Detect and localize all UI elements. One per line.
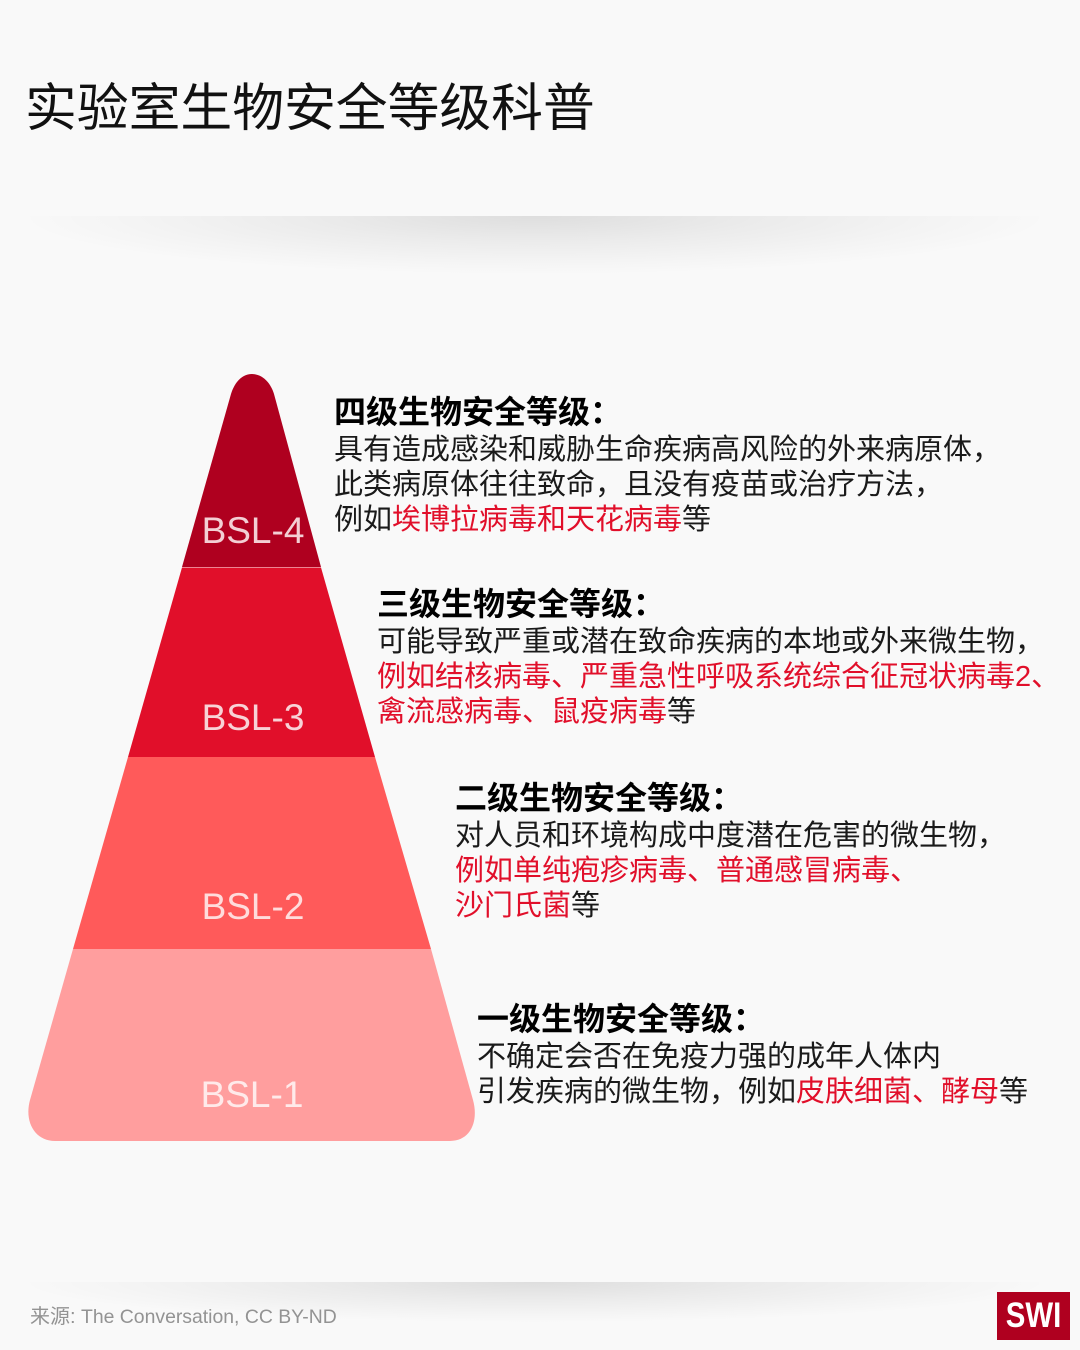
pyramid tier: BSL-2: BSL-2 — [202, 886, 304, 927]
text block: level 4: 四级生物安全等级： — [334, 394, 622, 430]
text block: level 3: 例如结核病毒、严重急性呼吸系统综合征冠状病毒2、 — [377, 660, 1060, 692]
text block: level 2: 对人员和环境构成中度潜在危害的微生物， — [455, 820, 1006, 852]
text block: level 4: 具有造成感染和威胁生命疾病高风险的外来病原体， — [334, 434, 1001, 466]
pyramid tier: BSL-4 — [182, 374, 321, 567]
text block: level 3: 禽流感病毒、鼠疫病毒等 — [377, 696, 696, 728]
logo: SWI — [997, 1292, 1070, 1340]
title: 实验室生物安全等级科普 — [25, 79, 595, 137]
pyramid tier: BSL-3 — [128, 568, 375, 757]
text block: level 1: 引发疾病的微生物，例如皮肤细菌、酵母等 — [477, 1076, 1028, 1108]
pyramid tier: BSL-1 — [28, 949, 475, 1141]
text block: level 3: 可能导致严重或潜在致命疾病的本地或外来微生物， — [377, 626, 1044, 658]
text block: level 2 — [455, 780, 1006, 922]
source note: : — [70, 1306, 76, 1328]
pyramid tier: BSL-1: BSL-1 — [201, 1074, 303, 1115]
text block: level 4: 此类病原体往往致命，且没有疫苗或治疗方法， — [334, 468, 943, 500]
text block: level 2: 二级生物安全等级： — [455, 780, 743, 816]
pyramid tier: BSL-3: BSL-3 — [202, 697, 304, 738]
text block: level 1 — [477, 1001, 1028, 1108]
pyramid tier: BSL-2 — [73, 757, 431, 949]
text block: level 3 — [377, 586, 1060, 728]
text block: level 2: 沙门氏菌等 — [455, 890, 600, 922]
source note: 来源 The Conversation, CC BY-ND — [30, 1306, 337, 1328]
text block: level 1: 一级生物安全等级： — [477, 1001, 765, 1037]
text block: level 1: 不确定会否在免疫力强的成年人体内 — [477, 1040, 941, 1072]
pyramid tier: BSL-4: BSL-4 — [202, 510, 304, 551]
header shadow divider — [25, 216, 1045, 274]
text block: level 4: 例如埃博拉病毒和天花病毒等 — [334, 504, 711, 536]
footer shadow divider — [25, 1282, 1045, 1322]
logo: SWI: SWI — [1006, 1296, 1061, 1335]
text block: level 2: 例如单纯疱疹病毒、普通感冒病毒、 — [455, 854, 919, 886]
text block: level 4 — [334, 394, 1001, 536]
text block: level 3: 三级生物安全等级： — [377, 586, 665, 622]
